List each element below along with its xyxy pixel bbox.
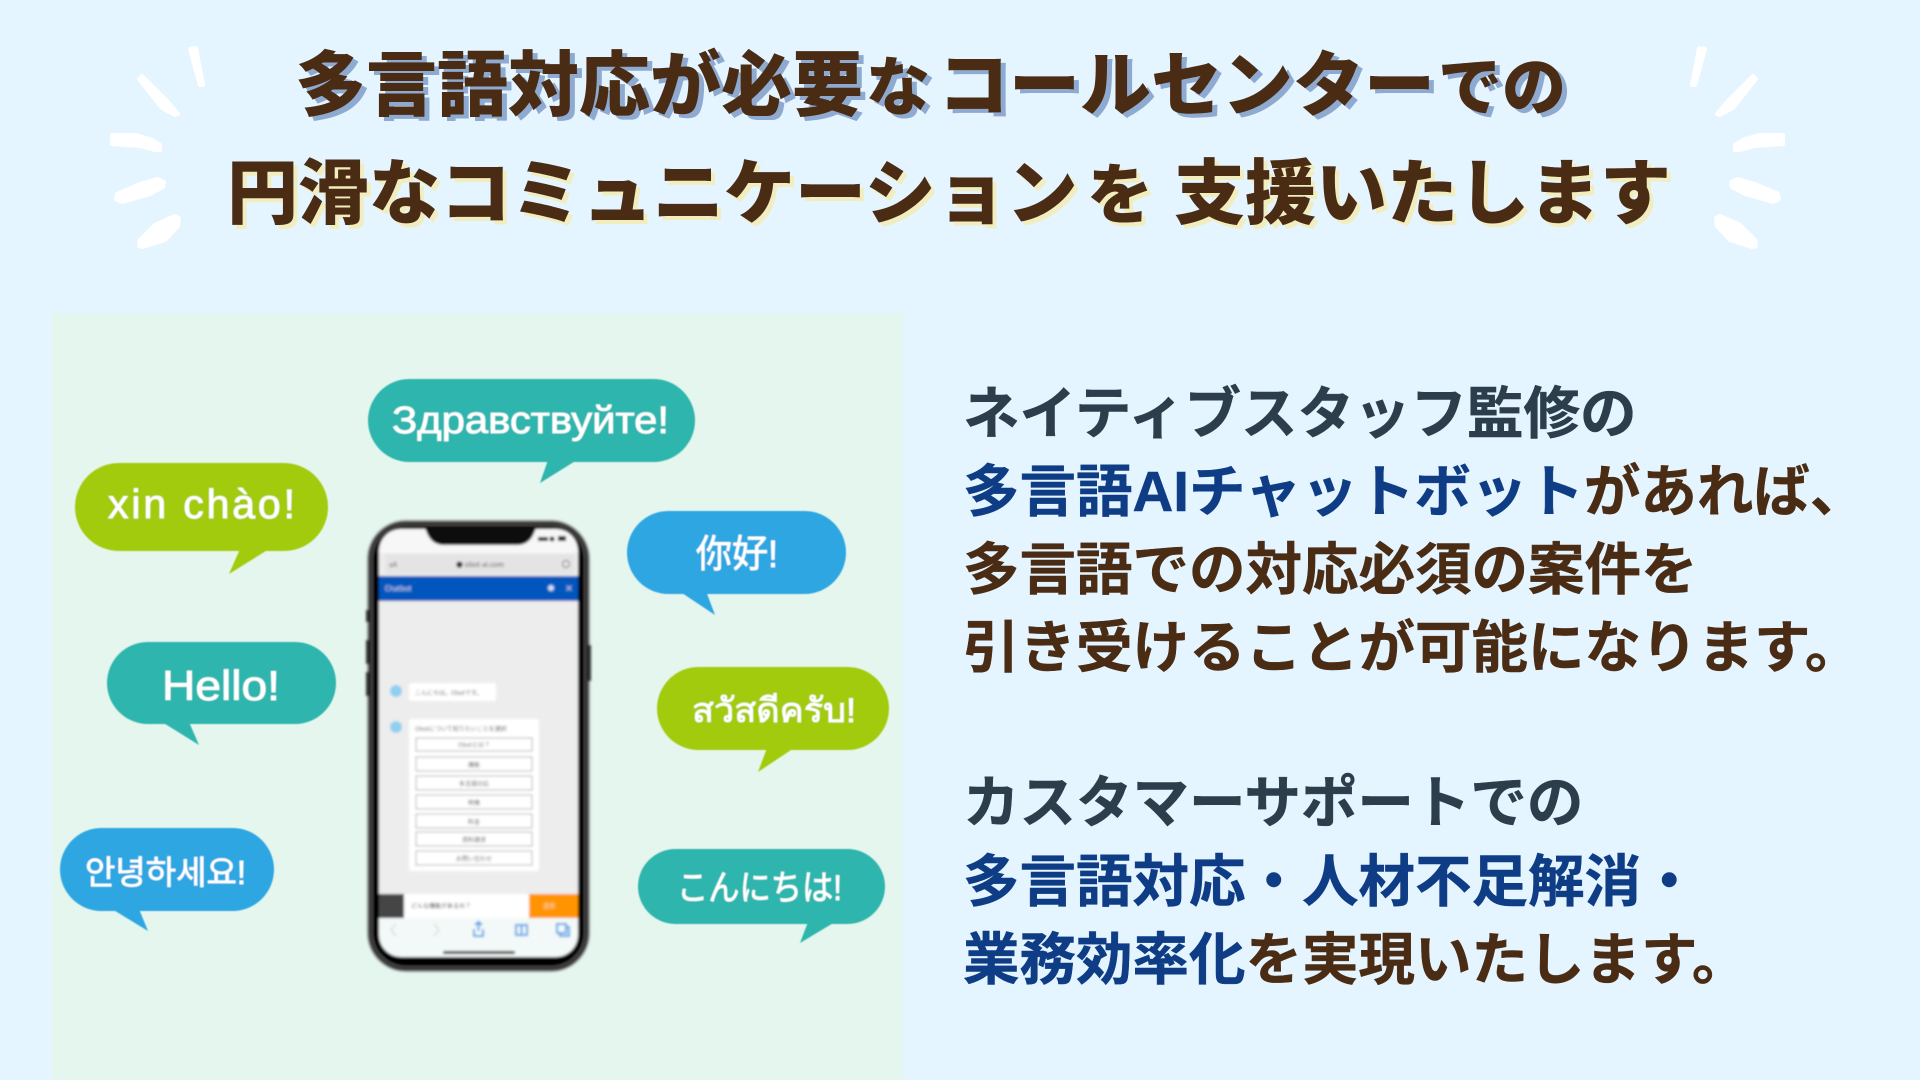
speech bubble: Thai — [657, 667, 889, 772]
chat input bar — [379, 894, 578, 918]
text block: native staff — [963, 382, 1866, 679]
speech bubble: Chinese — [627, 511, 846, 615]
browser address bar: ● obot-ai.com — [456, 560, 504, 570]
browser address bar — [385, 554, 575, 574]
notch — [425, 528, 536, 545]
chat header — [379, 576, 578, 601]
speech bubble: Russian: Здравствуйте! — [392, 400, 669, 442]
phone mockup with chatbot screen — [366, 521, 591, 971]
speech bubble: English: Hello! — [162, 662, 280, 709]
title line 1: での — [1438, 52, 1566, 124]
chat message 2 with options: 多言語対応 — [459, 779, 489, 788]
browser address bar: aA — [389, 560, 398, 570]
status bar icons — [538, 536, 566, 542]
title line 1: な — [866, 52, 930, 124]
chat message 2 with options: Obotとは？ — [458, 740, 490, 749]
chat message 1: こんにちは。Obotです。 — [415, 688, 482, 697]
title line 2: 支援いたします — [1174, 155, 1671, 234]
chat input bar: 送信 — [543, 901, 555, 910]
browser toolbar — [379, 918, 578, 957]
chat header: × — [565, 583, 573, 594]
chat message 2 with options: 料金 — [468, 817, 480, 826]
chat message 2 with options: Obotについて知りたいことを選択 — [415, 724, 507, 733]
title line 2 — [227, 155, 1671, 234]
title line 2: 円滑なコミュニケーション — [227, 155, 1078, 234]
chat message 2 with options: お問い合わせ — [456, 854, 492, 863]
icon: right sparkle rays — [1692, 48, 1783, 247]
speech bubble: Chinese: 你好! — [696, 534, 778, 576]
chat message 2 with options: 特徴 — [468, 798, 480, 807]
speech bubble: Korean — [60, 828, 274, 931]
text block: native staff: 多言語AIチャットボットがあれば、 — [963, 460, 1866, 523]
speech bubble: Thai: สวัสดีครับ! — [692, 692, 856, 730]
chat message 1 — [390, 683, 496, 701]
speech bubble: Korean: 안녕하세요! — [85, 854, 246, 891]
text block: customer support — [963, 771, 1748, 991]
speech bubble: Russian — [368, 379, 695, 483]
title — [227, 47, 1671, 234]
panel: multilingual chatbot illustration — [52, 313, 903, 1080]
text block: native staff: ネイティブスタッフ監修の — [963, 382, 1636, 445]
speech bubble: Vietnamese — [75, 463, 328, 574]
speech bubble: Vietnamese: xin chào! — [108, 481, 295, 527]
text block: customer support: 多言語対応・人材不足解消・ — [963, 850, 1698, 913]
text block: native staff: 多言語での対応必須の案件を — [963, 538, 1698, 601]
speech bubble: Japanese: こんにちは! — [677, 869, 842, 908]
chat message 2 with options: 資料請求 — [462, 835, 486, 844]
chat message 2 with options — [390, 719, 539, 871]
icon: left sparkle rays — [112, 48, 203, 247]
speech bubble: Japanese — [638, 849, 885, 943]
title line 2: を — [1087, 158, 1153, 232]
chat header: Chatbot — [385, 584, 412, 594]
speech bubble: English — [107, 642, 336, 745]
chat message 2 with options: 機能 — [468, 760, 480, 769]
text block: customer support: 業務効率化を実現いたします。 — [963, 928, 1748, 991]
title line 1 — [295, 47, 1566, 126]
title line 1: 多言語対応が必要 — [295, 47, 863, 126]
text block: customer support: カスタマーサポートでの — [963, 771, 1583, 834]
title line 1: コールセンター — [938, 47, 1435, 126]
chat input bar: どんな機能があるの？ — [411, 901, 471, 910]
text block: native staff: 引き受けることが可能になります。 — [963, 616, 1861, 679]
